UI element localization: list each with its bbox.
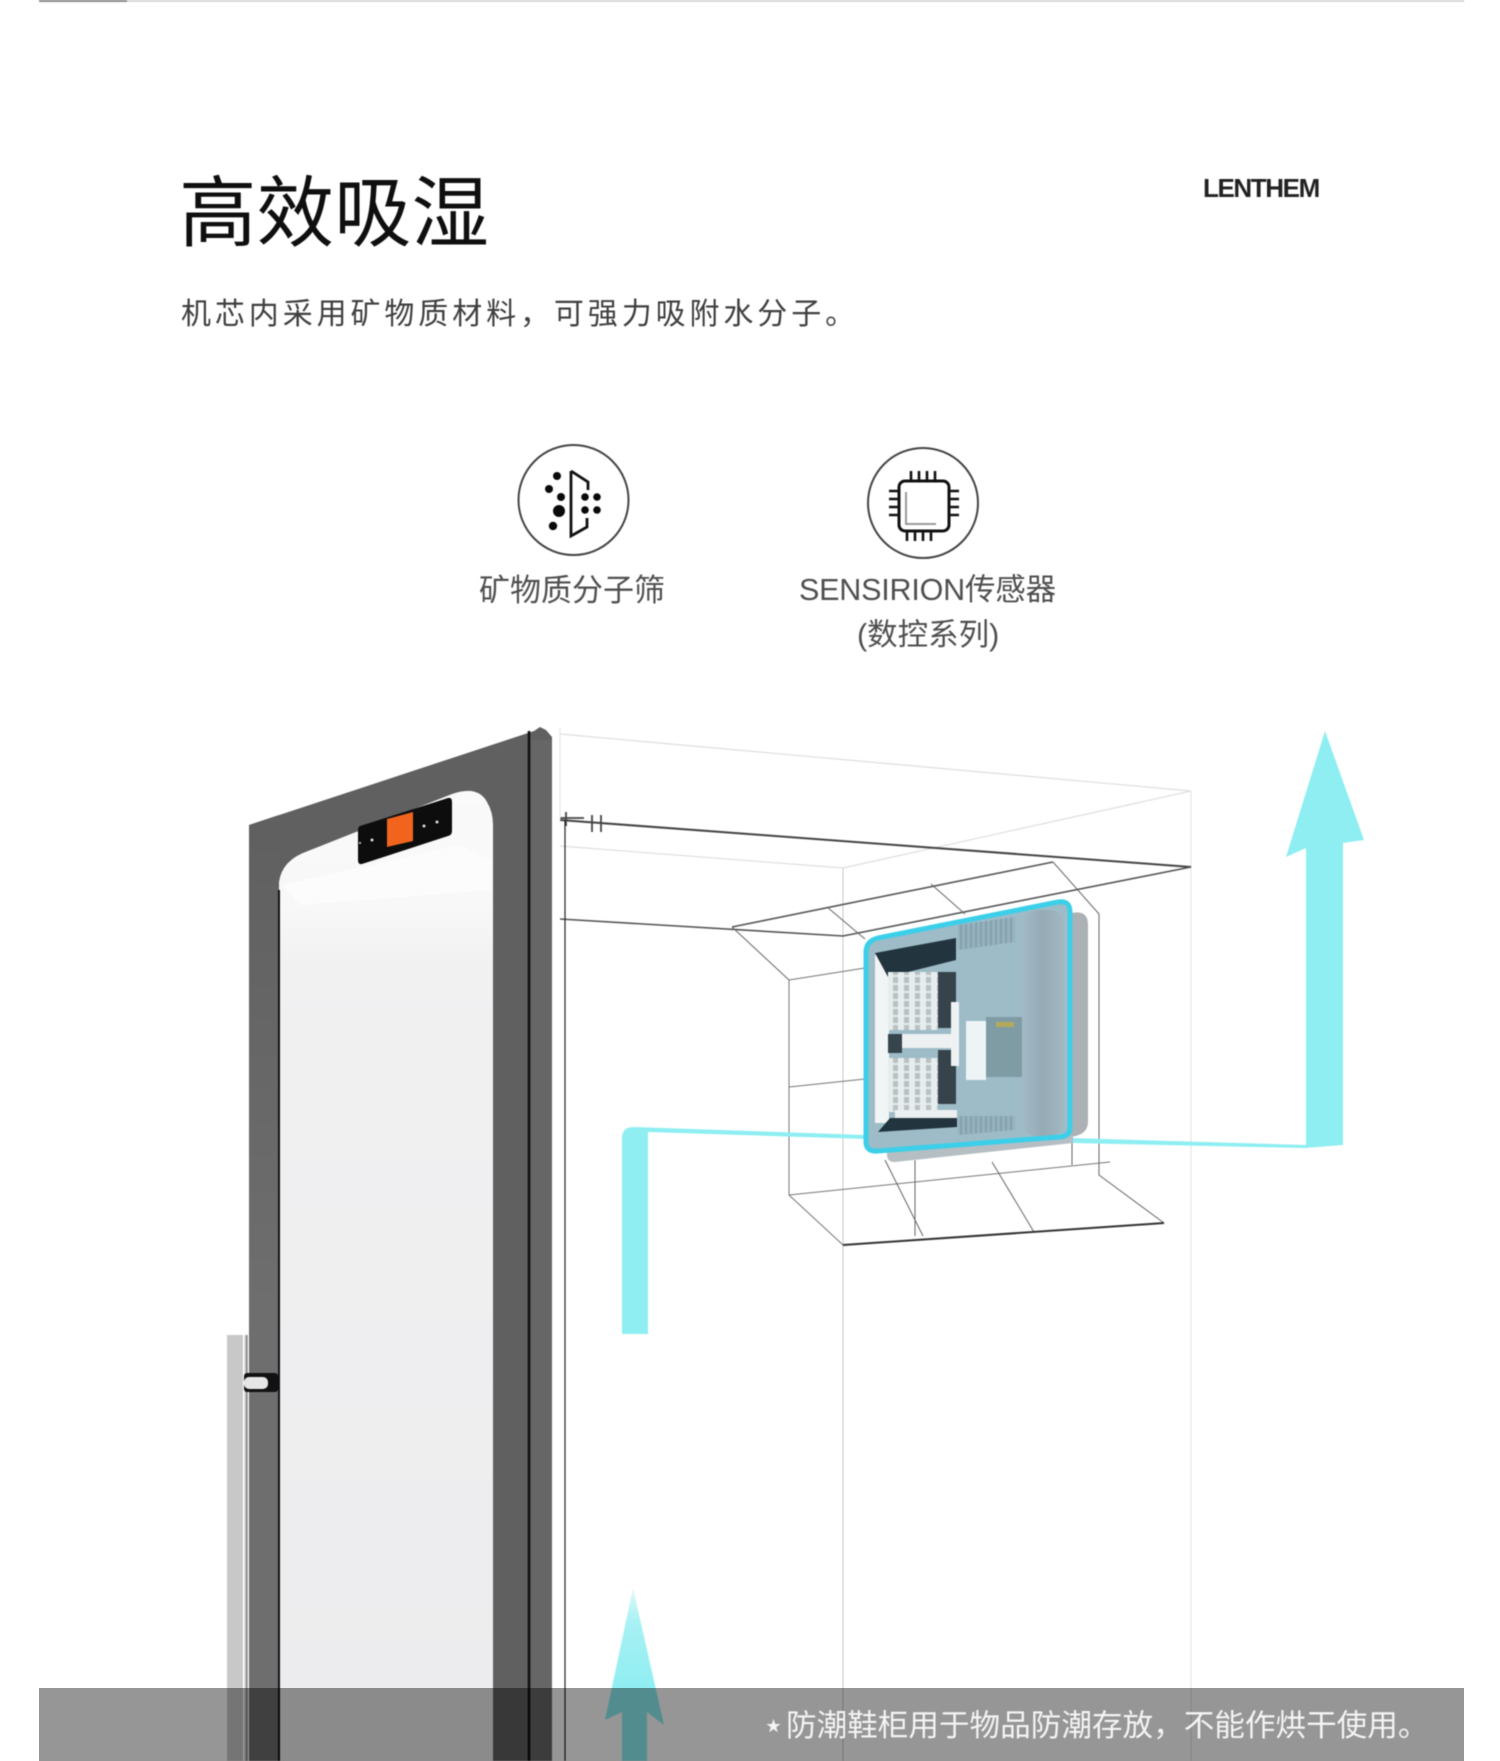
feature: mineral molecular sieve [479, 445, 665, 608]
label: mineral molecular sieve: 矿物质分子筛 [479, 573, 665, 608]
cabinet door [227, 727, 552, 1761]
feature: SENSIRION sensor [799, 448, 1056, 652]
label: numeric series: (数控系列) [857, 618, 999, 652]
icon: chip [868, 448, 978, 558]
glowing blue outline [866, 902, 1070, 1151]
module bottom lip [887, 1135, 1073, 1162]
molecular sieve left side [875, 938, 959, 1132]
subtitle: 机芯内采用矿物质材料，可强力吸附水分子。 [181, 298, 859, 331]
airflow left duct [622, 1127, 866, 1334]
brand name: LENTHEM [1203, 173, 1319, 203]
note text: 防潮鞋柜用于物品防潮存放，不能作烘干使用。 [786, 1709, 1428, 1743]
door left stile [249, 815, 279, 1761]
vent hatch areas [958, 917, 1015, 950]
module back panel [1068, 912, 1088, 1137]
door glass window [279, 791, 493, 1761]
airflow inlet arrow [605, 1588, 664, 1761]
bottom note band [39, 1688, 1464, 1761]
product label [966, 1017, 1022, 1080]
title: 高效吸湿 [179, 171, 489, 257]
door frame [249, 727, 552, 1761]
desiccant module [866, 902, 1088, 1162]
top edge strip [39, 0, 1464, 2]
rotor cylinder [1022, 910, 1064, 1136]
label: SENSIRION sensor: SENSIRION传感器 [799, 573, 1056, 607]
airflow outlet arrow [1072, 731, 1364, 1148]
cabinet wireframe [560, 728, 1191, 1761]
airflow path [605, 731, 1364, 1761]
door handle [227, 1335, 278, 1761]
icon: molecular sieve [518, 445, 628, 555]
module body [866, 902, 1070, 1151]
control display [358, 798, 452, 864]
note text: ★ [766, 1718, 781, 1735]
